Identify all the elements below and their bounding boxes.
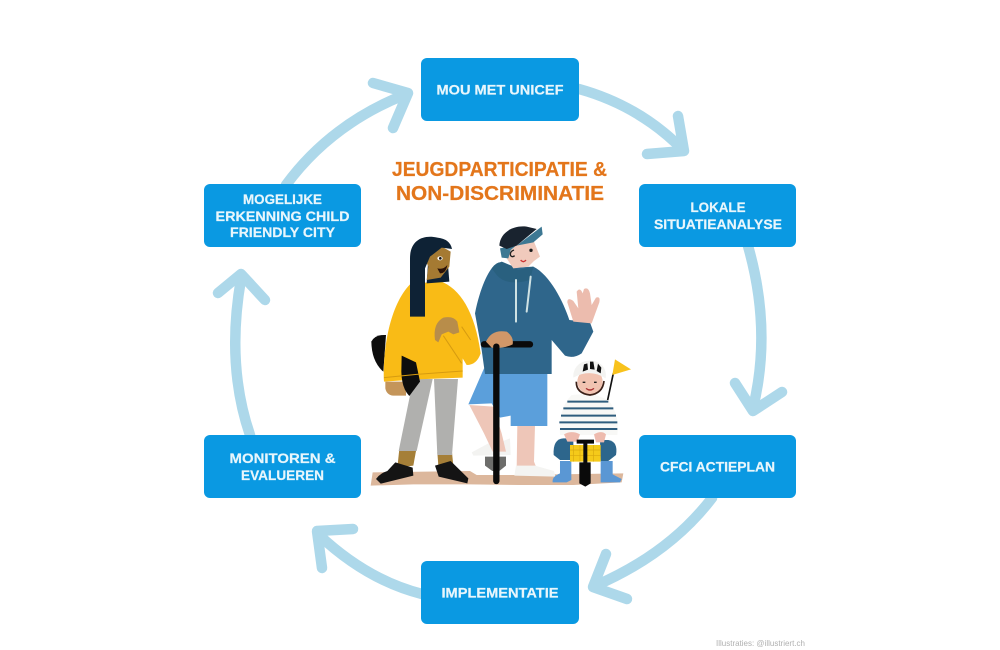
box: monitoren en evalueren: MONITOREN &: [230, 451, 336, 466]
box: lokale situatieanalyse: LOKALE: [690, 200, 746, 215]
box: implementatie: [421, 561, 579, 624]
woman: [371, 237, 481, 484]
box: lokale situatieanalyse: SITUATIEANALYSE: [654, 217, 782, 232]
box: implementatie: IMPLEMENTATIE: [442, 586, 558, 600]
box: lokale situatieanalyse: [639, 184, 796, 247]
arrow: actieplan to implementatie: [593, 498, 712, 599]
title: NON-DISCRIMINATIE: [396, 183, 604, 205]
title: JEUGDPARTICIPATIE &: [392, 159, 607, 181]
arrow: MOU to situatieanalyse: [579, 89, 684, 154]
arrow: monitoren to erkenning: [218, 274, 265, 435]
man: [468, 226, 600, 481]
box: mogelijke erkenning child friendly city: MOGELIJKE: [243, 192, 322, 207]
credit: Illustraties: @illustriert.ch: [716, 638, 805, 648]
box: monitoren en evalueren: EVALUEREN: [241, 468, 324, 483]
title: [392, 159, 607, 205]
box: MOU met UNICEF: [421, 58, 579, 121]
arrow: situatieanalyse to actieplan: [735, 246, 782, 411]
box: CFCI actieplan: CFCI ACTIEPLAN: [660, 460, 775, 474]
child with balance bike: [553, 359, 631, 487]
arrow: erkenning to MOU: [286, 83, 408, 185]
arrow: implementatie to monitoren: [317, 529, 422, 594]
box: CFCI actieplan: [639, 435, 796, 498]
ground: [371, 471, 623, 486]
box: mogelijke erkenning child friendly city: ERKENNING CHILD: [216, 209, 350, 224]
illustration: three people: [371, 226, 631, 487]
box: monitoren en evalueren: [204, 435, 361, 498]
box: MOU met UNICEF: MOU MET UNICEF: [436, 82, 564, 98]
box: mogelijke erkenning child friendly city: [204, 184, 361, 247]
box: mogelijke erkenning child friendly city: FRIENDLY CITY: [230, 225, 335, 240]
